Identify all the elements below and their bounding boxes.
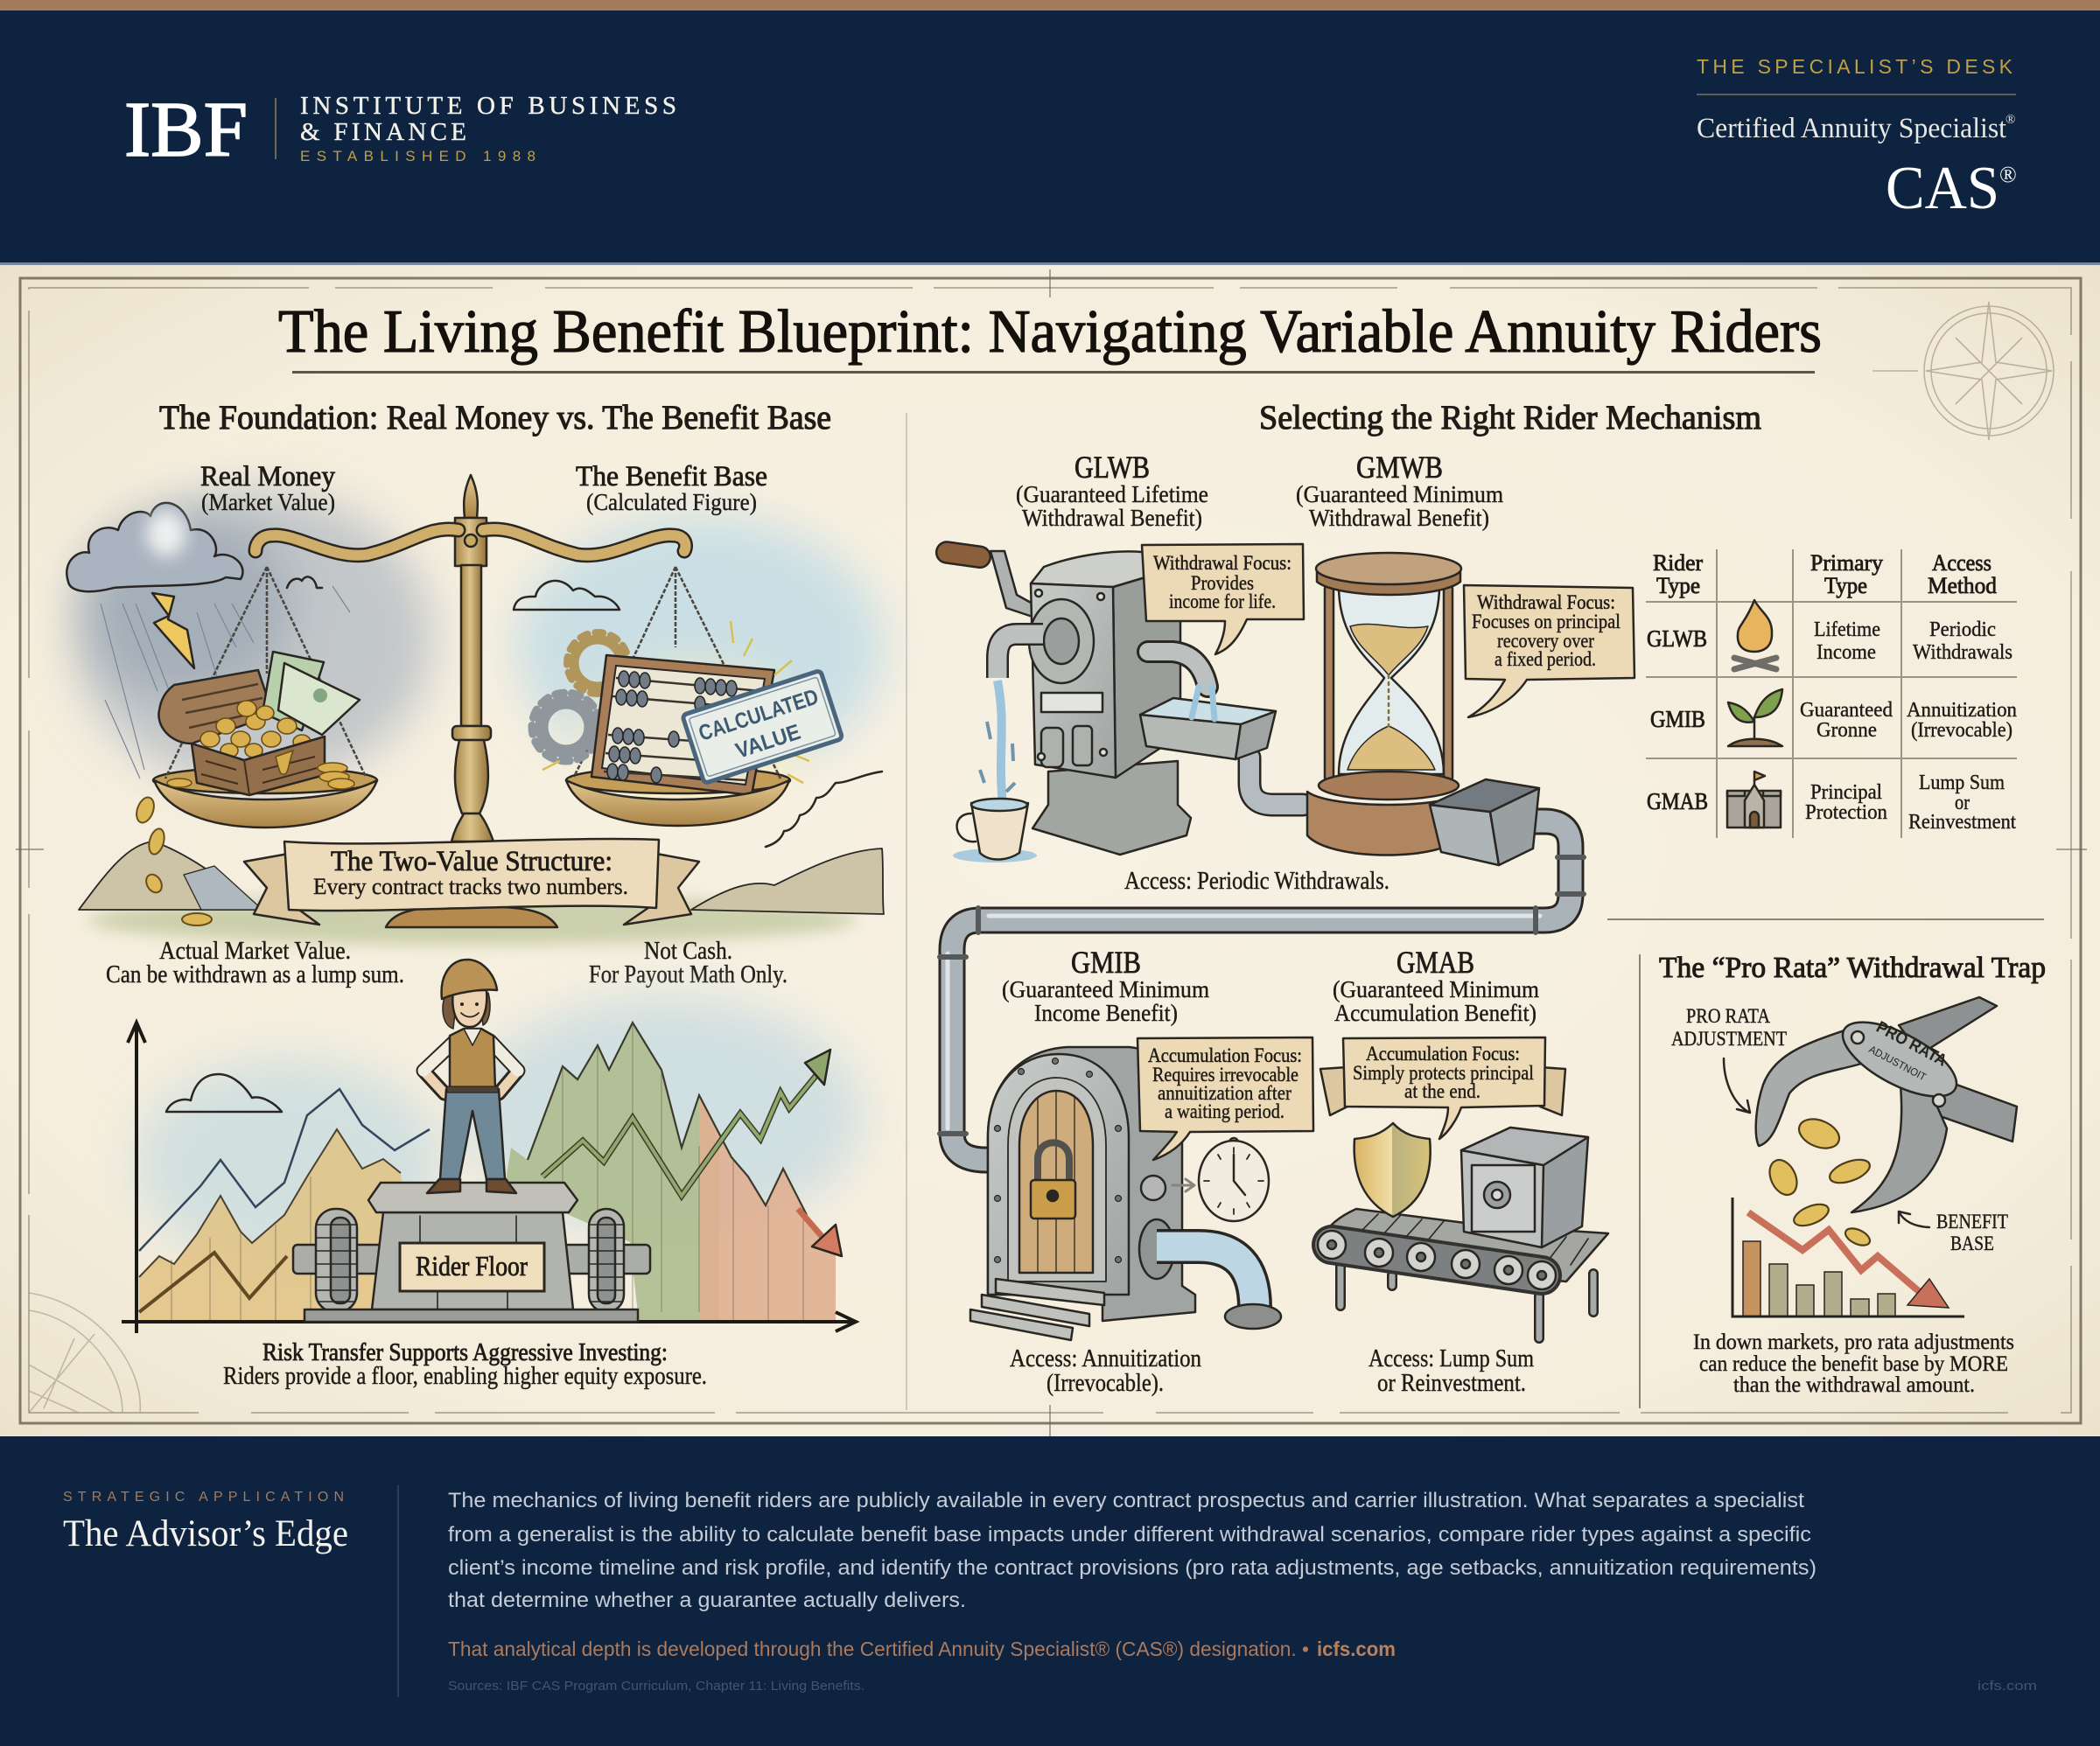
safe: [1461, 1128, 1588, 1247]
rider floor plate: Rider Floor: [416, 1250, 528, 1282]
connecting pipe: [940, 758, 1584, 1160]
left spout: [998, 634, 1043, 678]
panel: scale illustration: [66, 461, 884, 988]
calculated value stamp: [682, 670, 843, 784]
label: real money: [200, 461, 335, 515]
pro rata caption: than the withdrawal amount.: [1733, 1373, 1975, 1397]
footer paragraph: client’s income timeline and risk profile, and identify the contract provisions (pro rata adjustments, age setbacks, annuitization requirements): [448, 1556, 1816, 1580]
chart axes: [122, 1023, 856, 1333]
footer band: [0, 1436, 2100, 1746]
IBF logo: ESTABLISHED 1988: [300, 148, 536, 164]
table row: GLWB: GLWB: [1647, 625, 1707, 652]
GLWB callout: income for life.: [1169, 590, 1276, 612]
footer heading: [63, 1490, 348, 1554]
wispy cloud edge: [766, 772, 882, 847]
arrow: benefit base: [1899, 1212, 1929, 1227]
right pan: [566, 780, 789, 826]
pan coins: [167, 763, 354, 789]
vault body: [970, 1047, 1195, 1340]
access text: periodic: Access: Periodic Withdrawals.: [1124, 868, 1390, 895]
GMWB heading: (Guaranteed Minimum: [1296, 481, 1503, 507]
footer call to action: That analytical depth is developed through the Certified Annuity Specialist® (CAS®) designation. •: [448, 1638, 1309, 1660]
calculated value stamp: CALCULATED: [696, 684, 822, 746]
table row: GMIB: Guaranteed: [1800, 699, 1893, 722]
chart cloud: [166, 1074, 282, 1112]
table row: GMIB: Annuitization: [1907, 699, 2017, 722]
GMAB callout: at the end.: [1404, 1080, 1480, 1102]
separator and side rule: [1607, 919, 2044, 1408]
table header: Access: [1932, 550, 1992, 576]
GLWB callout: Provides: [1191, 572, 1254, 594]
rain: [101, 586, 350, 779]
footer paragraph: from a generalist is the ability to calculate benefit base impacts under different withdrawal scenarios, compare rider types against a specific: [448, 1523, 1811, 1547]
table header: Rider: [1653, 550, 1703, 576]
table row: GMIB: Gronne: [1816, 719, 1877, 742]
pro rata caption: can reduce the benefit base by MORE: [1699, 1352, 2008, 1376]
claw plate lettering: ADJUSTNOIT: [1867, 1043, 1928, 1084]
table row: GLWB: Lifetime: [1814, 618, 1880, 641]
designation block: [1697, 55, 2017, 222]
GMIB heading: [1002, 945, 1209, 1026]
icon: sprout: [1728, 689, 1782, 746]
label: real money: (Market Value): [201, 489, 335, 515]
lightning bolt: [152, 593, 194, 668]
right salmon area: [699, 1095, 836, 1322]
table header: Primary: [1810, 550, 1883, 576]
caption: actual market value: [106, 938, 404, 988]
caption: risk transfer: Riders provide a floor, enabling higher equity exposure.: [223, 1363, 707, 1390]
section heading: foundation: The Foundation: Real Money vs. The Benefit Base: [159, 399, 831, 436]
calculated value stamp: VALUE: [732, 720, 803, 764]
caption: actual market value: Can be withdrawn as a lump sum.: [106, 961, 404, 988]
GMIB callout: annuitization after: [1158, 1082, 1292, 1104]
table header: [1653, 550, 1997, 598]
parchment panel: [0, 265, 2100, 1436]
right green area: [505, 1023, 719, 1322]
designation block: ®: [2006, 113, 2015, 127]
footer paragraph: that determine whether a guarantee actually delivers.: [448, 1589, 966, 1612]
label: benefit base: The Benefit Base: [576, 461, 767, 492]
right pan back: [566, 767, 790, 793]
compass rose: top right: [1872, 302, 2054, 440]
section heading: mechanisms: Selecting the Right Rider Mechanism: [1259, 399, 1761, 436]
shield: [1354, 1123, 1431, 1217]
pro rata heading: The “Pro Rata” Withdrawal Trap: [1659, 952, 2046, 984]
footer paragraph: The mechanics of living benefit riders are publicly available in every contract prospectus and carrier illustration. What separates a specialist: [448, 1489, 1804, 1512]
table row: GLWB: Withdrawals: [1913, 641, 2012, 664]
header band: [0, 0, 2100, 265]
access text: lump sum: or Reinvestment.: [1377, 1370, 1526, 1397]
caption: risk transfer: [223, 1339, 707, 1390]
rider floor machine: [293, 1183, 650, 1322]
mini bar chart: [1732, 1198, 1964, 1316]
compass rose: bottom left: [29, 1293, 140, 1413]
scale beam: [256, 529, 686, 555]
banner: two-value structure: [244, 839, 699, 925]
table row: GLWB: Periodic: [1929, 618, 1996, 641]
designation block: CAS: [1886, 155, 1999, 222]
arrow: adjustment: [1724, 1058, 1750, 1113]
label: real money: Real Money: [200, 461, 335, 492]
table row: GLWB: [1647, 618, 2012, 664]
rider: GMIB vault: [970, 945, 1313, 1397]
storm wash: [74, 490, 433, 787]
table header: Type: [1656, 573, 1700, 598]
label: pro rata adjustment: PRO RATA: [1686, 1005, 1770, 1027]
label: benefit base: BENEFIT: [1936, 1211, 2008, 1233]
table header: Type: [1824, 573, 1867, 598]
GMIB callout: [1138, 1037, 1313, 1160]
label: benefit base: [576, 461, 767, 515]
IBF logo: [124, 87, 676, 173]
vault steps: [996, 1279, 1104, 1305]
access text: annuitization: Access: Annuitization: [1010, 1345, 1201, 1372]
comparison table: [1646, 549, 2017, 838]
steel box: [1430, 779, 1539, 865]
GMIB heading: Income Benefit): [1034, 1000, 1178, 1026]
rider: GMWB hourglass: [1124, 450, 1634, 895]
GMWB callout: Withdrawal Focus:: [1477, 591, 1615, 613]
scale chains: [165, 567, 780, 779]
GMAB callout: Accumulation Focus:: [1366, 1043, 1520, 1065]
GMWB heading: Withdrawal Benefit): [1309, 505, 1489, 531]
icon: flame: [1734, 600, 1776, 669]
caption: not cash: [589, 938, 788, 988]
treasure chest: [158, 652, 360, 795]
table row: GLWB: Income: [1816, 641, 1876, 664]
storm cloud: [66, 503, 242, 591]
table row: GMIB: [1650, 699, 2017, 742]
IBF logo: INSTITUTE OF BUSINESS: [300, 92, 676, 120]
main title: The Living Benefit Blueprint: Navigating Variable Annuity Riders: [278, 298, 1822, 366]
GMWB heading: GMWB: [1356, 450, 1443, 485]
label: benefit base: BASE: [1950, 1233, 1994, 1254]
GMWB callout: [1464, 585, 1634, 717]
claw: [1756, 997, 2017, 1212]
ground wash: [88, 896, 858, 945]
table row: GMAB: GMAB: [1647, 788, 1708, 814]
table row: GMAB: [1647, 772, 2016, 834]
left pan: [153, 767, 377, 828]
designation block: THE SPECIALIST’S DESK: [1697, 55, 2013, 78]
table row: GMIB: GMIB: [1650, 706, 1705, 732]
IBF logo: & FINANCE: [300, 118, 466, 146]
rising arrow: [542, 1070, 821, 1196]
GLWB heading: Withdrawal Benefit): [1022, 505, 1202, 531]
table row: GMIB: (Irrevocable): [1911, 719, 2012, 742]
label: pro rata adjustment: [1671, 1005, 1787, 1050]
caption: risk transfer: Risk Transfer Supports Aggressive Investing:: [262, 1339, 668, 1366]
crank handle: [935, 541, 1032, 617]
banner: two-value structure: The Two-Value Structure:: [331, 846, 612, 877]
rider: GLWB pump machine: [935, 450, 1304, 863]
IBF logo: IBF: [124, 87, 248, 173]
pro rata caption: In down markets, pro rata adjustments: [1693, 1330, 2014, 1354]
GMIB callout: Accumulation Focus:: [1148, 1044, 1302, 1066]
engineer figure: [424, 960, 518, 1193]
GLWB callout: [1142, 544, 1304, 654]
GMIB heading: GMIB: [1071, 945, 1141, 980]
GMWB callout: recovery over: [1497, 630, 1594, 652]
access text: lump sum: Access: Lump Sum: [1368, 1345, 1534, 1372]
label: benefit base: [1936, 1211, 2008, 1254]
left area: [139, 1129, 411, 1322]
footer url: icfs.com: [1978, 1679, 2037, 1694]
cloud highlight: [147, 511, 186, 556]
falling coins: [133, 795, 212, 925]
footer call to action: icfs.com: [1317, 1638, 1396, 1660]
scale post: [386, 475, 557, 927]
table row: GMAB: Principal: [1810, 781, 1882, 804]
chart wash: [136, 997, 862, 1268]
caption: not cash: Not Cash.: [644, 938, 732, 965]
timer clock: [1172, 1138, 1269, 1221]
falling arrow: [798, 1209, 827, 1242]
GMIB callout: a waiting period.: [1165, 1100, 1284, 1122]
sky wash: [516, 516, 884, 796]
hourglass: [1307, 553, 1464, 856]
GMWB heading: [1296, 450, 1503, 531]
table header: Method: [1928, 573, 1997, 598]
table row: GMAB: Protection: [1805, 801, 1887, 824]
rider floor plate: [400, 1243, 544, 1291]
conveyor belt: [1318, 1209, 1608, 1289]
GMAB heading: (Guaranteed Minimum: [1333, 976, 1539, 1002]
GMWB callout: Focuses on principal: [1472, 611, 1620, 632]
GLWB heading: (Guaranteed Lifetime: [1016, 481, 1208, 507]
GLWB heading: [1016, 450, 1208, 531]
GMAB callout: Simply protects principal: [1353, 1062, 1534, 1084]
designation block: Certified Annuity Specialist: [1697, 113, 2006, 144]
pro rata caption: [1693, 1330, 2014, 1397]
table row: GMAB: Reinvestment: [1908, 811, 2016, 834]
caption: actual market value: Actual Market Value.: [159, 938, 351, 965]
footer paragraph: [448, 1489, 1816, 1612]
GMIB heading: (Guaranteed Minimum: [1002, 976, 1209, 1002]
gears: [532, 632, 628, 761]
small cloud: [514, 581, 620, 610]
conveyor legs: [1340, 1267, 1593, 1338]
panel: market chart with rider floor: [122, 960, 862, 1390]
icon: castle: [1727, 772, 1781, 828]
abacus: [592, 655, 774, 795]
GMIB callout: Requires irrevocable: [1152, 1064, 1298, 1086]
GMAB heading: GMAB: [1396, 945, 1474, 980]
falling coins: [1764, 1114, 1872, 1249]
water stream: [998, 681, 1003, 805]
GMWB callout: a fixed period.: [1494, 648, 1596, 670]
small storm wisp: [287, 576, 322, 588]
access text: lump sum: [1368, 1345, 1534, 1397]
pump body: [1029, 551, 1191, 855]
banknotes: [262, 652, 324, 730]
label: pro rata adjustment: ADJUSTMENT: [1671, 1028, 1787, 1050]
footer heading: The Advisor’s Edge: [63, 1513, 348, 1554]
footer heading: STRATEGIC APPLICATION: [63, 1490, 344, 1505]
GLWB heading: GLWB: [1074, 450, 1150, 485]
access text: annuitization: (Irrevocable).: [1046, 1370, 1164, 1397]
footer sources: Sources: IBF CAS Program Curriculum, Chapter 11: Living Benefits.: [448, 1679, 864, 1694]
engineer arms: [424, 1041, 518, 1093]
trough and right spout: [1140, 652, 1276, 759]
glow rays: [542, 621, 809, 783]
table row: GMAB: or: [1955, 792, 1970, 814]
GMAB callout: [1320, 1037, 1565, 1139]
rider: GMAB conveyor: [1318, 945, 1608, 1397]
banner: two-value structure: Every contract tracks two numbers.: [313, 874, 628, 899]
designation block: ®: [1999, 162, 2017, 187]
GMAB heading: [1333, 945, 1539, 1026]
coffee cup: [953, 799, 1037, 863]
claw plate lettering: PRO RATA: [1873, 1018, 1950, 1071]
access text: annuitization: [1010, 1345, 1201, 1397]
table row: GMAB: Lump Sum: [1919, 772, 2005, 794]
panel: pro rata trap: [1659, 952, 2046, 1397]
GMAB heading: Accumulation Benefit): [1334, 1000, 1536, 1026]
caption: not cash: For Payout Math Only.: [589, 961, 788, 988]
GLWB callout: Withdrawal Focus:: [1153, 552, 1292, 574]
water drops: [980, 722, 1015, 792]
outflow pipe: [1157, 1247, 1255, 1308]
coin pile: [200, 701, 311, 758]
label: benefit base: (Calculated Figure): [586, 489, 757, 515]
hills: [79, 842, 884, 914]
